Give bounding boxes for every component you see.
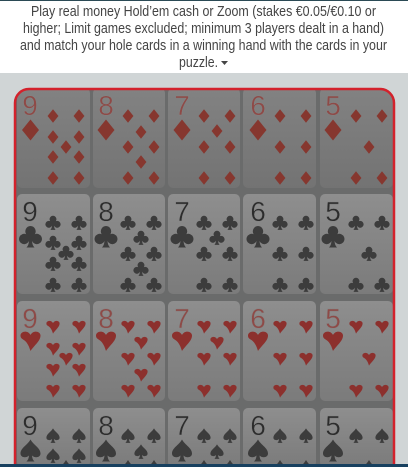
card: 5 of hearts bbox=[320, 301, 393, 401]
icon: dropdown caret bbox=[221, 61, 228, 65]
row: diamonds bbox=[17, 88, 393, 188]
card: 9 of clubs bbox=[17, 194, 90, 294]
card: 5 of spades bbox=[320, 408, 393, 467]
card: 9 of clubs: 9 bbox=[22, 196, 38, 227]
card: 7 of spades bbox=[168, 408, 240, 467]
card: 6 of clubs bbox=[243, 194, 316, 294]
card: 6 of diamonds: 6 bbox=[250, 90, 266, 121]
card: 9 of diamonds bbox=[17, 88, 90, 188]
card: 9 of hearts bbox=[17, 301, 90, 401]
card: 9 of hearts: 9 bbox=[22, 303, 38, 334]
card: 8 of hearts bbox=[93, 301, 165, 401]
card: 5 of clubs bbox=[320, 194, 393, 294]
card: 6 of spades: 6 bbox=[250, 410, 266, 441]
card: 8 of spades: 8 bbox=[98, 410, 114, 441]
card: 9 of spades: 9 bbox=[22, 410, 38, 441]
card: 7 of clubs bbox=[168, 194, 240, 294]
card: 6 of clubs: 6 bbox=[250, 196, 266, 227]
card: 8 of diamonds bbox=[93, 88, 165, 188]
intro text block bbox=[0, 0, 408, 73]
card: 6 of diamonds bbox=[243, 88, 316, 188]
row: clubs bbox=[17, 194, 393, 294]
intro text block: puzzle. bbox=[179, 55, 218, 71]
card: 6 of hearts bbox=[243, 301, 316, 401]
card: 8 of clubs bbox=[93, 194, 165, 294]
card: 8 of clubs: 8 bbox=[98, 196, 114, 227]
card: 8 of diamonds: 8 bbox=[98, 90, 114, 121]
card: 6 of spades bbox=[243, 408, 316, 467]
card: 7 of clubs: 7 bbox=[174, 196, 190, 227]
card: 8 of hearts: 8 bbox=[98, 303, 114, 334]
card: 5 of hearts: 5 bbox=[325, 303, 341, 334]
row: spades bbox=[17, 408, 393, 467]
card: 5 of diamonds bbox=[320, 88, 393, 188]
card: 7 of hearts: 7 bbox=[174, 303, 190, 334]
card: 5 of diamonds: 5 bbox=[325, 90, 341, 121]
card: 9 of spades bbox=[17, 408, 90, 467]
card: 7 of diamonds bbox=[168, 88, 240, 188]
card: 8 of spades bbox=[93, 408, 165, 467]
row: hearts bbox=[17, 301, 393, 401]
card: 7 of spades: 7 bbox=[174, 410, 190, 441]
card: 6 of hearts: 6 bbox=[250, 303, 266, 334]
card: 5 of spades: 5 bbox=[325, 410, 341, 441]
card: 7 of hearts bbox=[168, 301, 240, 401]
card: 7 of diamonds: 7 bbox=[174, 90, 190, 121]
card: 9 of diamonds: 9 bbox=[22, 90, 38, 121]
card: 5 of clubs: 5 bbox=[325, 196, 341, 227]
panel: puzzle card grid bbox=[15, 88, 394, 467]
